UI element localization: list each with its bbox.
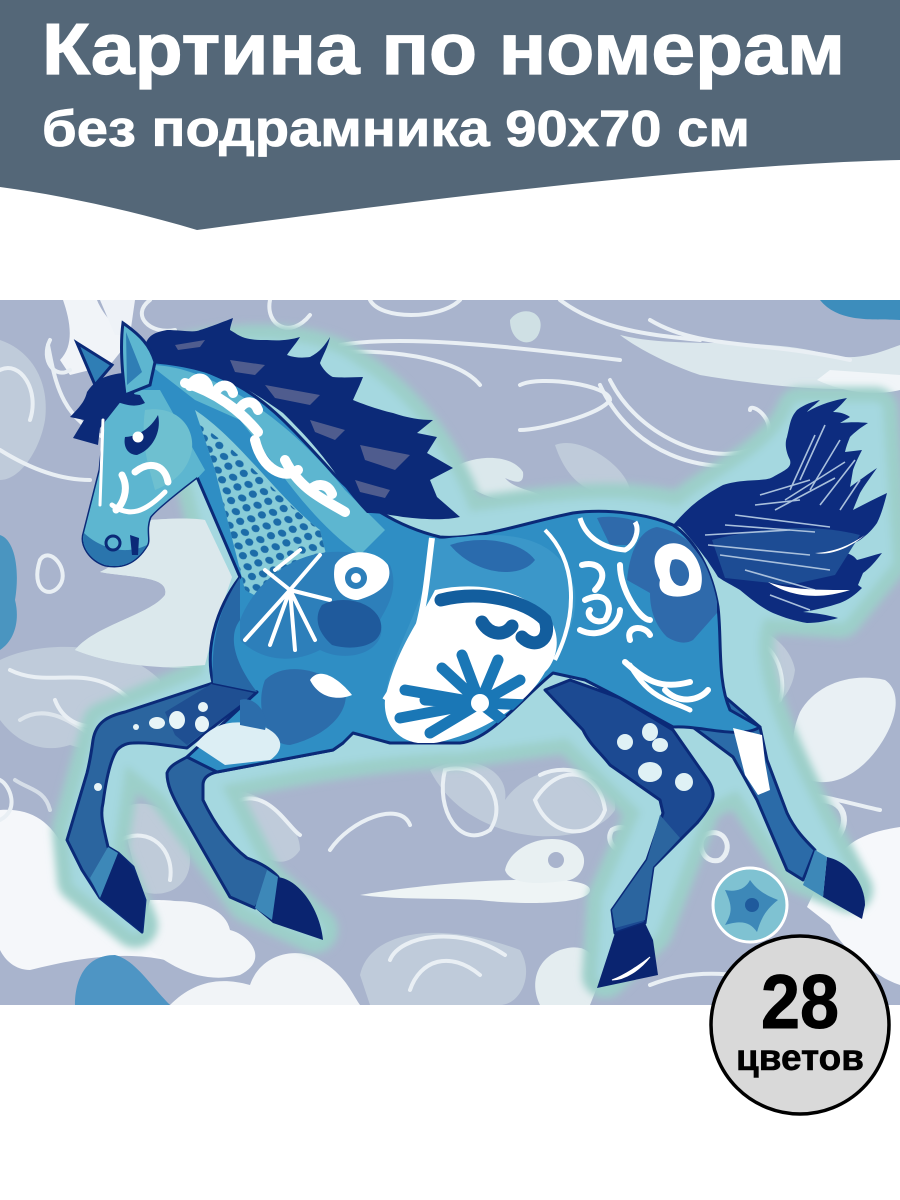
head light fill xyxy=(80,390,205,570)
far hind hoof highlight xyxy=(612,957,650,980)
top haunch white scroll xyxy=(580,518,637,550)
background field xyxy=(0,300,900,1005)
tail xyxy=(673,398,887,623)
far hind leg flowers xyxy=(617,723,693,791)
far front leg dark shoulder xyxy=(165,684,254,745)
light halo around horse xyxy=(75,348,885,975)
far front leg flowers xyxy=(94,702,209,791)
heading xyxy=(42,10,845,157)
header band xyxy=(0,0,900,230)
left cloud xyxy=(0,810,176,970)
far ear xyxy=(77,343,112,385)
scroll cloud xyxy=(505,839,584,883)
near hind leg xyxy=(690,690,815,880)
oval flower petals xyxy=(400,655,530,733)
oval upper dark patch xyxy=(450,540,535,572)
right upper cloud xyxy=(793,678,896,782)
far hind leg xyxy=(545,680,713,933)
near front hoof xyxy=(255,877,323,940)
far front pastern xyxy=(90,847,118,898)
chin cloud xyxy=(77,518,190,668)
horse xyxy=(67,318,887,988)
top ring flower xyxy=(510,311,541,342)
body patterns xyxy=(80,365,717,765)
lower flank flowers xyxy=(261,669,346,745)
neck white scrolls xyxy=(185,378,345,512)
mane brown and light flecks xyxy=(175,340,410,498)
pale S cloud xyxy=(462,458,533,498)
top haunch patch xyxy=(597,517,640,545)
haunch scrolls xyxy=(580,564,708,710)
speckled neck panel xyxy=(195,410,330,620)
oval white panel xyxy=(385,586,557,744)
shoulder scroll xyxy=(334,552,389,600)
face forelock xyxy=(70,373,135,445)
haunch peony xyxy=(655,543,702,597)
far front leg xyxy=(67,683,257,932)
far front hoof xyxy=(100,853,145,932)
nostril and mouth xyxy=(83,533,147,566)
top left white ribbon xyxy=(60,300,120,375)
right cloud xyxy=(807,827,900,985)
mane xyxy=(145,318,460,519)
near front leg xyxy=(166,744,344,910)
background clouds xyxy=(0,300,900,1005)
cheek panel xyxy=(144,409,192,490)
blue wave xyxy=(75,955,170,1005)
bottom cloud xyxy=(535,947,598,1005)
number: 28 xyxy=(761,960,839,1045)
lower wave cloud xyxy=(170,953,360,1005)
near ear inner shade xyxy=(126,332,142,385)
picture: painted horse on cloud background xyxy=(0,300,900,1005)
top right cloud band xyxy=(620,335,900,389)
near ear xyxy=(122,323,155,395)
neck band light xyxy=(150,365,385,555)
body, neck and head xyxy=(83,360,760,772)
near hind pastern xyxy=(803,850,827,897)
near hind leg flowers xyxy=(733,728,770,795)
shoulder flower base xyxy=(240,552,393,659)
lower flank white flowers xyxy=(195,722,280,765)
chest dark shade xyxy=(213,577,257,692)
shoulder dark lobe xyxy=(318,600,381,648)
eye xyxy=(125,415,159,455)
far hind hoof xyxy=(597,923,658,988)
subtitle line: без подрамника 90х70 см xyxy=(42,100,750,157)
chin cloud foreground edge xyxy=(75,518,232,666)
background flower clusters xyxy=(0,340,795,1005)
speckles xyxy=(200,425,330,620)
near front pastern xyxy=(255,870,278,920)
long streak cloud xyxy=(360,879,590,903)
haunch dark patch xyxy=(627,527,717,643)
teal flower on right xyxy=(713,868,787,942)
far hind lower leg xyxy=(612,815,680,928)
near hind hoof xyxy=(823,857,865,919)
colour count badge xyxy=(711,936,889,1114)
oval lines xyxy=(385,538,432,700)
title line: Картина по номерам xyxy=(42,10,845,90)
shoulder flower branches xyxy=(245,550,330,650)
oval dark scroll xyxy=(441,596,547,643)
face white scrolls xyxy=(100,420,168,512)
label: цветов xyxy=(736,1037,864,1078)
eyelashes xyxy=(112,392,145,406)
oval upper panel xyxy=(385,535,575,738)
background line ornaments xyxy=(0,300,880,990)
